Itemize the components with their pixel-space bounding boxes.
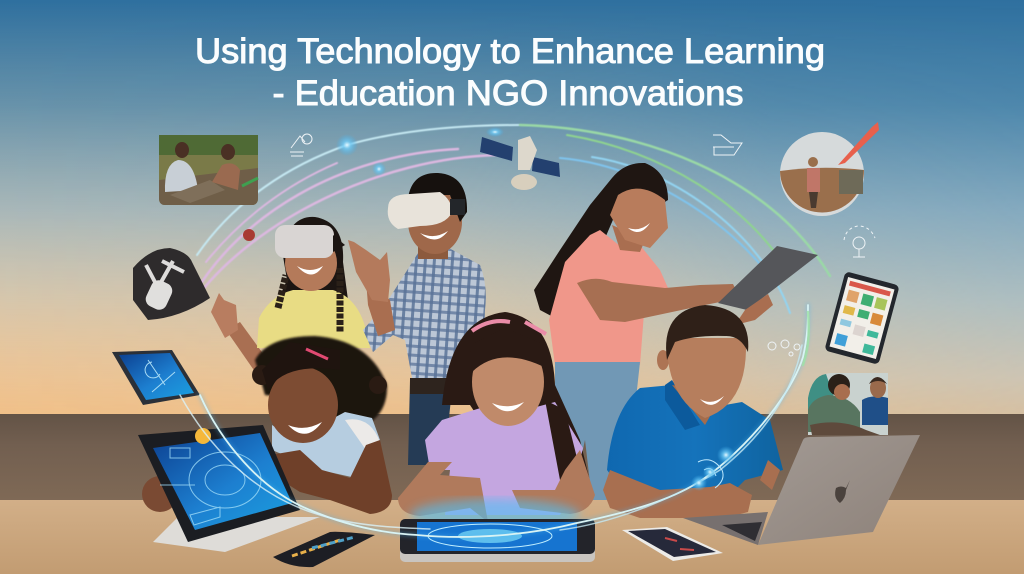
sky background (0, 0, 1024, 420)
title: Using Technology to Enhance Learning (195, 32, 825, 71)
orbit arcs in front of children (180, 305, 809, 537)
title: - Education NGO Innovations (272, 74, 744, 113)
girl with curly hair and tablet (252, 336, 392, 514)
glow point near satellite (486, 127, 504, 137)
sunset glow (0, 27, 973, 414)
small red ball (243, 229, 255, 241)
smartphone right (622, 527, 723, 561)
small blueprint tablet (112, 350, 200, 405)
laptop (683, 435, 920, 545)
white tablet stand (153, 517, 320, 552)
glow points on polo shirt (691, 446, 735, 491)
boy in plaid shirt with VR headset (348, 173, 486, 465)
large blueprint tablet (138, 425, 300, 542)
icon: boat sketch (713, 135, 742, 155)
smartphone left (273, 532, 375, 567)
girl in center with lilac shirt (398, 312, 595, 522)
hand holding tablet (142, 476, 178, 512)
apple-style logo mark (835, 480, 850, 503)
orbit arcs behind children (193, 125, 830, 313)
title (195, 32, 825, 113)
boy in blue polo (603, 305, 783, 518)
yellow glow orb (195, 428, 211, 444)
black badge icon with tools (133, 248, 210, 320)
girl in salmon shirt with tablet (534, 163, 818, 500)
girl in yellow shirt with VR headset (211, 217, 370, 376)
group photo (808, 373, 888, 435)
icon: small sketch scribbles (768, 340, 800, 356)
centre tablet with holographic glow (400, 499, 595, 562)
satellite (480, 136, 560, 190)
desert ground (0, 414, 1024, 504)
icon: small atom sketch (290, 134, 312, 156)
table (0, 500, 1024, 574)
right tablet with app grid (824, 271, 900, 365)
glow point top left (336, 134, 358, 156)
circular photo with rocket (780, 122, 879, 216)
glow point middle (372, 162, 386, 176)
photo: people outdoors (159, 135, 258, 205)
icon: tree sketch (844, 226, 875, 257)
logo swirl on polo shirt (698, 460, 723, 488)
